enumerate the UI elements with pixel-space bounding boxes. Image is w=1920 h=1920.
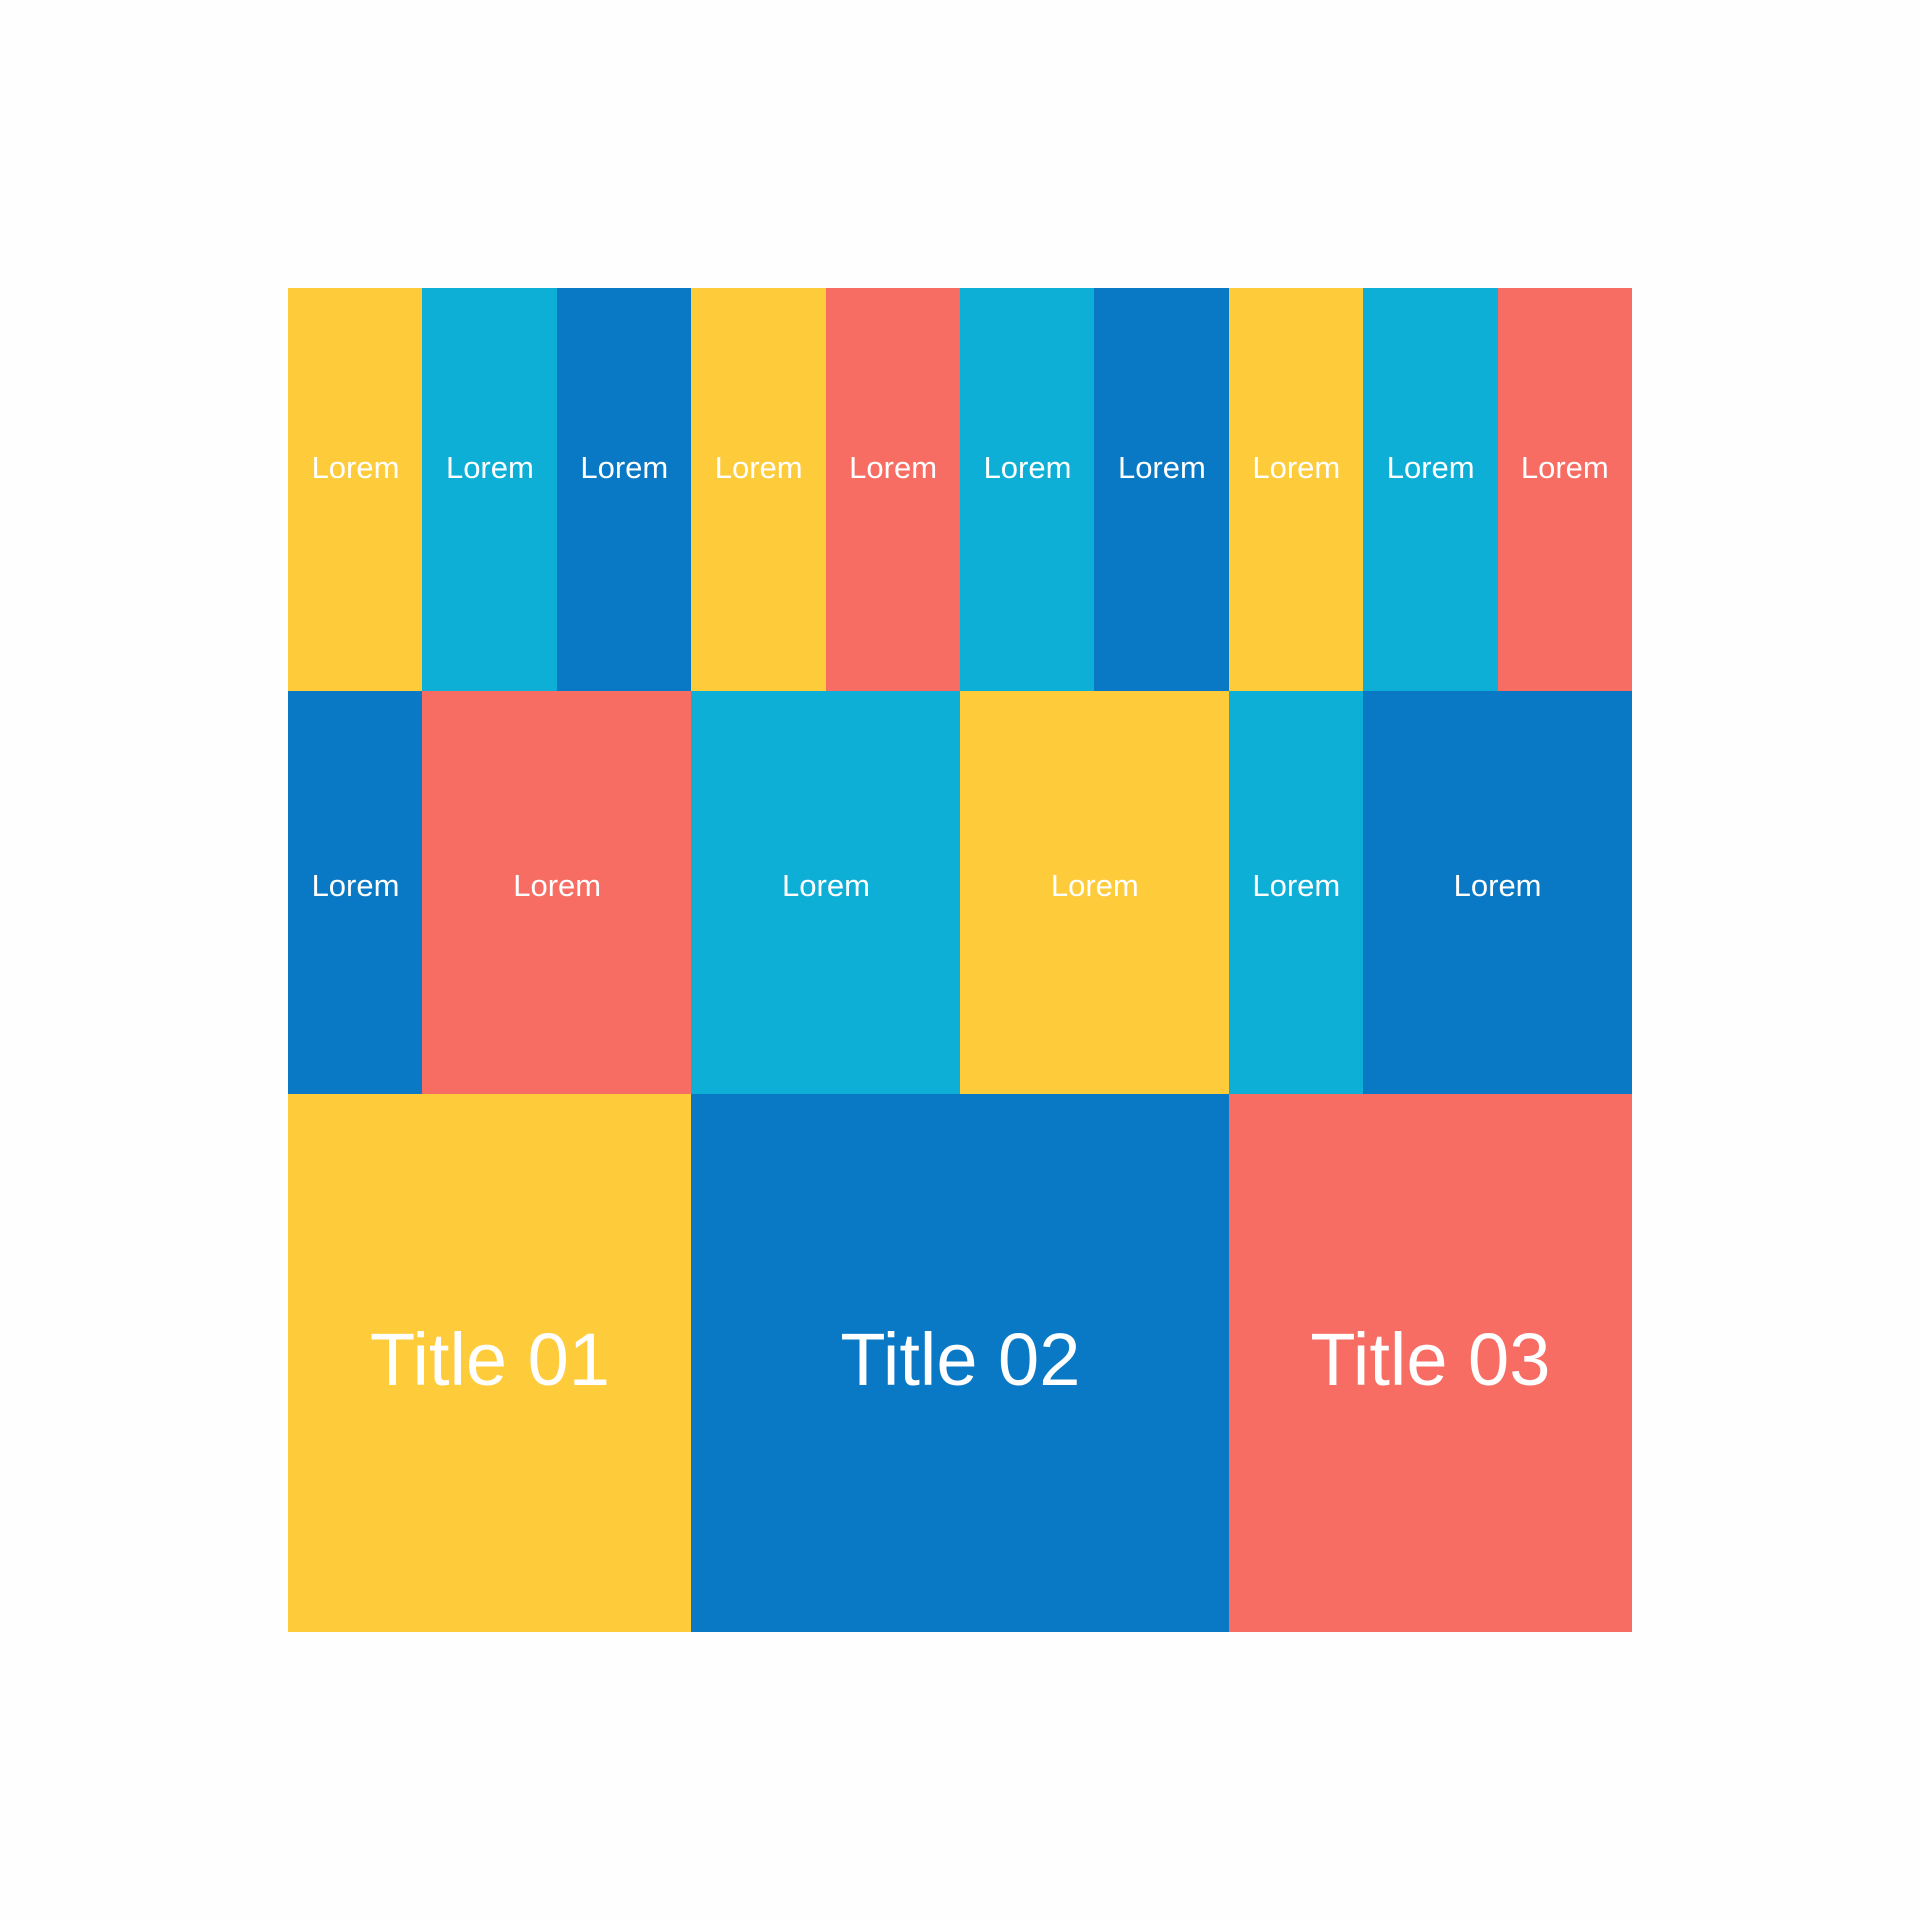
title 03	[1229, 1094, 1632, 1632]
tile 9: Lorem	[1387, 450, 1475, 485]
tile 1	[288, 691, 423, 1095]
treemap grid	[288, 288, 1632, 1632]
tile 8	[1229, 288, 1364, 692]
tile 2: Lorem	[513, 868, 601, 903]
title 02	[691, 1094, 1230, 1632]
title 01	[288, 1094, 692, 1632]
tile 2	[422, 288, 557, 692]
tile 4	[691, 288, 826, 692]
tile 7	[1094, 288, 1229, 692]
row 3: titles	[288, 1094, 1632, 1632]
tile 6	[1363, 691, 1632, 1095]
title 02: Title 02	[840, 1318, 1080, 1401]
tile 6: Lorem	[1454, 868, 1542, 903]
tile 3	[691, 691, 961, 1095]
tile 7: Lorem	[1118, 450, 1206, 485]
tile 4	[960, 691, 1230, 1095]
tile 3	[557, 288, 692, 692]
tile 5	[826, 288, 961, 692]
tile 1	[288, 288, 423, 692]
row 2: lorem tiles	[288, 691, 1632, 1094]
title 03: Title 03	[1310, 1318, 1550, 1401]
tile 5: Lorem	[1252, 868, 1340, 903]
title 01: Title 01	[370, 1318, 610, 1401]
tile 10	[1498, 288, 1632, 692]
tile 6: Lorem	[984, 450, 1071, 485]
tile 4: Lorem	[1051, 868, 1139, 903]
tile 3: Lorem	[782, 868, 870, 903]
tile 1: Lorem	[312, 450, 399, 485]
tile 5	[1229, 691, 1364, 1095]
tile 10: Lorem	[1521, 450, 1609, 485]
tile 1: Lorem	[312, 868, 399, 903]
tile 2	[422, 691, 692, 1095]
tile 6	[960, 288, 1095, 692]
tile 5: Lorem	[849, 450, 937, 485]
tile 3: Lorem	[580, 450, 668, 485]
row 1: lorem tiles	[288, 288, 1632, 691]
tile 2: Lorem	[446, 450, 534, 485]
tile 9	[1363, 288, 1498, 692]
tile 8: Lorem	[1252, 450, 1340, 485]
tile 4: Lorem	[715, 450, 803, 485]
